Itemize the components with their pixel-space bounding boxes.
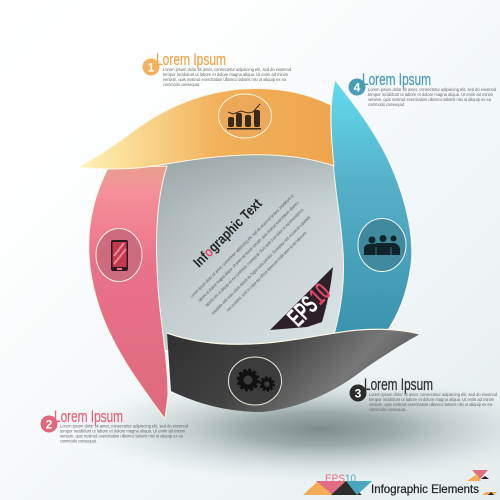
text block: center body: non proident, sunt in culpa qui officia deserunt mollit anim id est laborum. xyxy=(225,230,308,313)
footer logo: Infographic Elements xyxy=(371,482,479,496)
callout 4: Lorem Ipsum xyxy=(362,70,431,89)
callout 2: commodo consequat. xyxy=(60,438,97,444)
panel: step 4 blue xyxy=(331,80,412,335)
footer logo: 10 xyxy=(345,473,356,485)
callout 2 xyxy=(40,407,188,444)
text block: center body: laboris nisi ut aliquip ex ea commodo consequat. Duis aute irure dolor in reprehenderit in xyxy=(204,207,305,308)
text block: center body: labore et dolore magna aliqua. Ut enim ad minim veniam, quis nostrud exercitation ullamco xyxy=(197,200,300,303)
panel: step 3 dark xyxy=(167,329,420,412)
text block: center body: Lorem ipsum dolor sit amet, consectetur adipiscing elit, sed do eiusmod tempor incididunt ut xyxy=(189,193,295,299)
icon: people xyxy=(358,218,406,272)
panel: step 2 pink xyxy=(89,166,168,419)
callout 2: Lorem ipsum dolor sit amet, consectetur adipiscing elit, sed do eiusmod xyxy=(60,424,188,428)
footer logo: EPS xyxy=(325,473,345,485)
callout 2: veniam, quis nostrud exercitation ullamco laboris nisi ut aliquip ex ea xyxy=(60,434,183,438)
panel: step 1 orange xyxy=(80,89,334,169)
footer logo xyxy=(303,470,497,496)
callout 1: veniam, quis nostrud exercitation ullamco laboris nisi ut aliquip ex ea xyxy=(163,77,286,82)
callout 3: commodo consequat. xyxy=(369,407,406,412)
callout 1: Lorem ipsum dolor sit amet, consectetur adipiscing elit, sed do eiusmod xyxy=(163,67,291,72)
icon: phone xyxy=(96,228,142,282)
text block: center body: voluptate velit esse cillum dolore eu fugiat nulla pariatur. Excepteur sint occaecat cupidatat xyxy=(210,214,312,316)
badge: EPS10 corner: EPS xyxy=(281,290,323,332)
text block: center body xyxy=(189,193,312,316)
callout 1 xyxy=(142,50,291,87)
callout 4 xyxy=(348,70,496,107)
icon: chart xyxy=(218,94,272,138)
floor shadow xyxy=(70,374,500,484)
callout 4: commodo consequat. xyxy=(368,102,405,107)
callout 3 xyxy=(350,375,497,412)
callout 2: Lorem Ipsum xyxy=(54,407,123,426)
callout 2: tempor incididunt ut labore et dolore magna aliqua. Ut enim ad minim xyxy=(60,428,185,434)
callout 3: 3 xyxy=(355,386,362,400)
callout 1: Lorem Ipsum xyxy=(156,50,226,69)
callout 2: 2 xyxy=(46,418,53,432)
badge: EPS10 corner: 10 xyxy=(303,277,336,310)
callout 4: 4 xyxy=(354,80,361,94)
callout 1: commodo consequat. xyxy=(163,82,200,87)
icon: gears xyxy=(228,357,282,405)
panel: center xyxy=(150,150,345,350)
callout 1: 1 xyxy=(148,60,155,74)
callout 3: Lorem Ipsum xyxy=(364,375,433,394)
callout 1: tempor incididunt ut labore et dolore magna aliqua. Ut enim ad minim xyxy=(163,72,288,77)
heading: Infographic Text: Infographic Text xyxy=(190,195,265,270)
